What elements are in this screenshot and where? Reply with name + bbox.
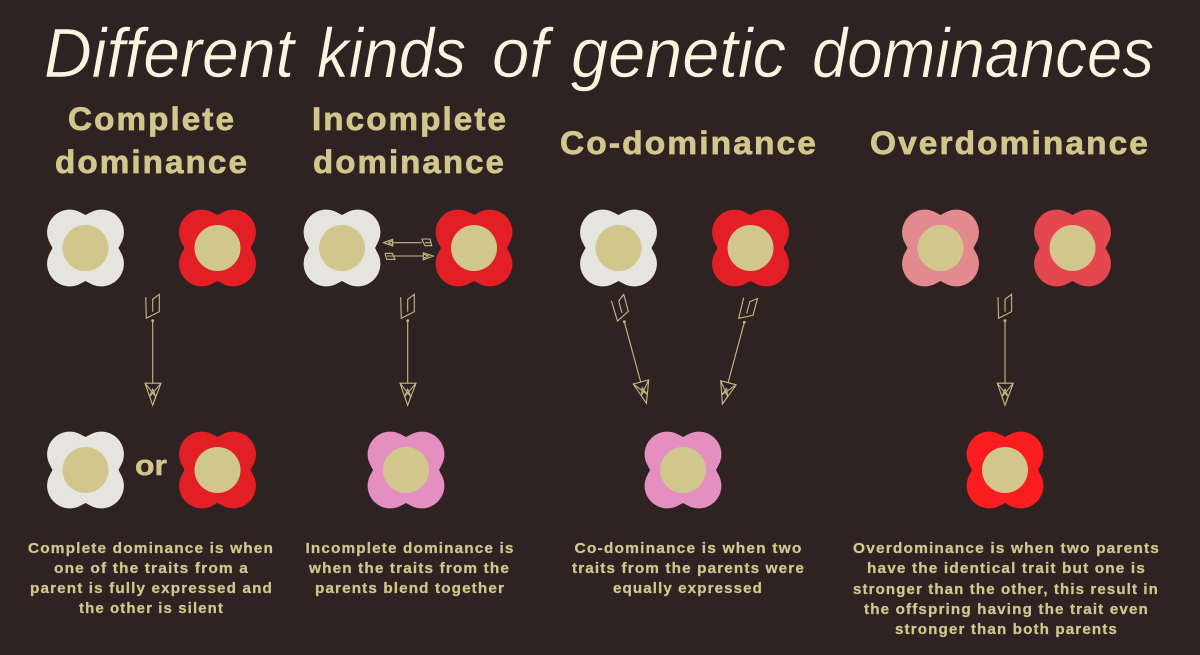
icon: white parent flower <box>47 210 124 286</box>
description: incomplete dominance: when the traits from the <box>308 560 510 577</box>
description: overdominance: have the identical trait but one is <box>867 560 1146 577</box>
description: incomplete dominance: parents blend together <box>315 580 505 597</box>
heading: co-dominance: Co-dominance <box>560 125 818 161</box>
description: complete dominance: Complete dominance is when <box>28 540 274 557</box>
heading: incomplete dominance: dominance <box>313 144 506 180</box>
icon: red parent flower <box>179 210 256 286</box>
heading: complete dominance: dominance <box>55 144 249 180</box>
icon: pink offspring flower <box>368 432 444 508</box>
icon: pink offspring flower <box>645 432 721 508</box>
heading: incomplete dominance <box>312 101 508 180</box>
icon: red offspring flower <box>179 432 256 508</box>
title: of <box>492 14 554 92</box>
panel: overdominance <box>853 125 1160 638</box>
description: overdominance: Overdominance is when two parents <box>853 540 1160 557</box>
panel: complete dominance <box>28 101 274 617</box>
icon: medium red parent flower <box>1034 210 1111 286</box>
description: overdominance: stronger than both parents <box>895 621 1118 638</box>
description: incomplete dominance <box>306 540 514 597</box>
arrow: blending right <box>385 253 433 260</box>
heading: complete dominance: Complete <box>68 101 236 137</box>
arrow: down <box>145 294 161 405</box>
description: co-dominance: traits from the parents were <box>572 560 805 577</box>
arrow: blending left <box>384 239 432 246</box>
title: Different <box>44 14 296 92</box>
icon: white parent flower <box>304 210 380 286</box>
description: complete dominance: the other is silent <box>79 600 224 617</box>
description: co-dominance <box>572 540 805 597</box>
title: genetic <box>571 14 786 92</box>
arrow: diagonal left <box>715 295 759 406</box>
label: or: or <box>135 450 167 482</box>
title <box>44 14 1154 92</box>
icon: white parent flower <box>580 210 657 286</box>
description: incomplete dominance: Incomplete dominance is <box>306 540 514 557</box>
description: overdominance: the offspring having the trait even <box>864 601 1149 618</box>
description: complete dominance: parent is fully expressed and <box>30 580 273 597</box>
icon: bright red offspring flower <box>967 432 1043 508</box>
heading: complete dominance <box>55 101 249 180</box>
arrow: down <box>400 294 416 405</box>
title: kinds <box>317 14 466 92</box>
description: complete dominance <box>28 540 274 617</box>
description: co-dominance: Co-dominance is when two <box>574 540 802 557</box>
icon: red parent flower <box>712 210 789 286</box>
description: overdominance: stronger than the other, this result in <box>853 581 1159 598</box>
icon: white offspring flower <box>47 432 124 508</box>
description: overdominance <box>853 540 1160 638</box>
icon: red parent flower <box>436 210 512 286</box>
panel: co-dominance <box>560 125 818 597</box>
title: dominances <box>812 14 1154 92</box>
arrow: down <box>997 294 1013 405</box>
heading: incomplete dominance: Incomplete <box>312 101 508 137</box>
heading: overdominance: Overdominance <box>870 125 1150 161</box>
description: co-dominance: equally expressed <box>613 580 763 597</box>
icon: light red parent flower <box>902 210 979 286</box>
panel: incomplete dominance <box>304 101 514 597</box>
arrow: diagonal right <box>610 294 654 405</box>
description: complete dominance: one of the traits from a <box>54 560 249 577</box>
